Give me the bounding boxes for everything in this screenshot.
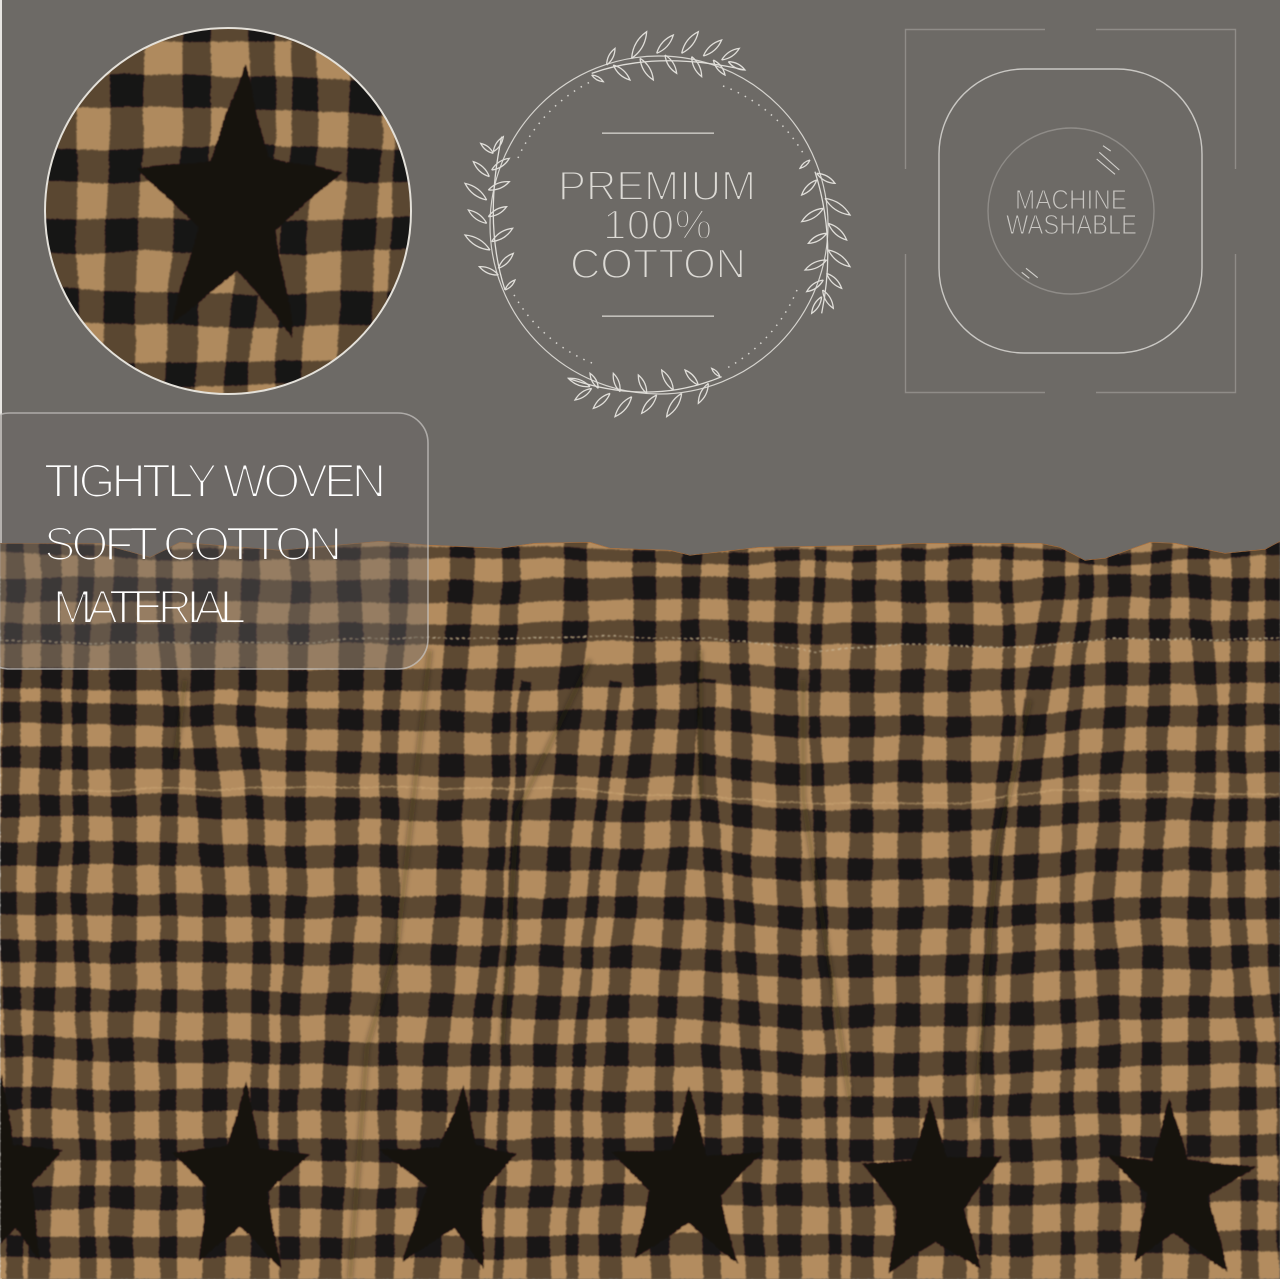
fabric folds	[175, 650, 1030, 1279]
star	[137, 63, 342, 337]
panel text	[44, 454, 386, 633]
fabric: black and tan gingham valance	[0, 520, 1280, 1279]
star 5	[862, 1097, 1001, 1272]
panel text: TIGHTLY WOVEN	[44, 454, 386, 507]
circle outline	[45, 28, 411, 394]
top branch leaves	[591, 30, 746, 83]
columns	[8, 530, 16, 1279]
panel text: SOFT COTTON	[44, 517, 342, 570]
inner circle outline	[988, 128, 1154, 294]
star 6	[1107, 1097, 1256, 1273]
badge text: COTTON	[570, 240, 746, 287]
star 1	[0, 1075, 61, 1260]
circular close-up of star on gingham	[44, 27, 412, 395]
stitched seams	[0, 638, 1280, 803]
glint marks	[1022, 146, 1119, 278]
bottom branch leaves	[567, 367, 721, 419]
rule above badge text	[602, 132, 714, 134]
translucent panel box	[0, 413, 428, 669]
badge text: 100%	[603, 201, 712, 248]
outer corner brackets	[906, 30, 1236, 392]
washable text	[1006, 184, 1137, 240]
left branch leaves	[463, 135, 516, 291]
wreath branches and leaves	[463, 30, 852, 419]
washable text: MACHINE	[1015, 184, 1127, 215]
panel text: MATERIAL	[53, 580, 246, 633]
rows	[0, 546, 1280, 560]
badge text	[558, 162, 756, 287]
stems	[493, 61, 828, 392]
rule below badge text	[602, 316, 714, 317]
star 2	[171, 1082, 310, 1268]
star 4	[610, 1087, 764, 1263]
right branch leaves	[799, 159, 852, 315]
rounded square outline	[939, 69, 1202, 353]
badge: premium 100% cotton wreath	[463, 30, 852, 419]
badge text: PREMIUM	[558, 162, 756, 209]
panel: tightly woven soft cotton material	[0, 413, 428, 669]
wreath rings	[490, 56, 828, 394]
washable text: WASHABLE	[1006, 209, 1137, 240]
badge: machine washable	[906, 30, 1236, 392]
star 3	[378, 1085, 516, 1268]
